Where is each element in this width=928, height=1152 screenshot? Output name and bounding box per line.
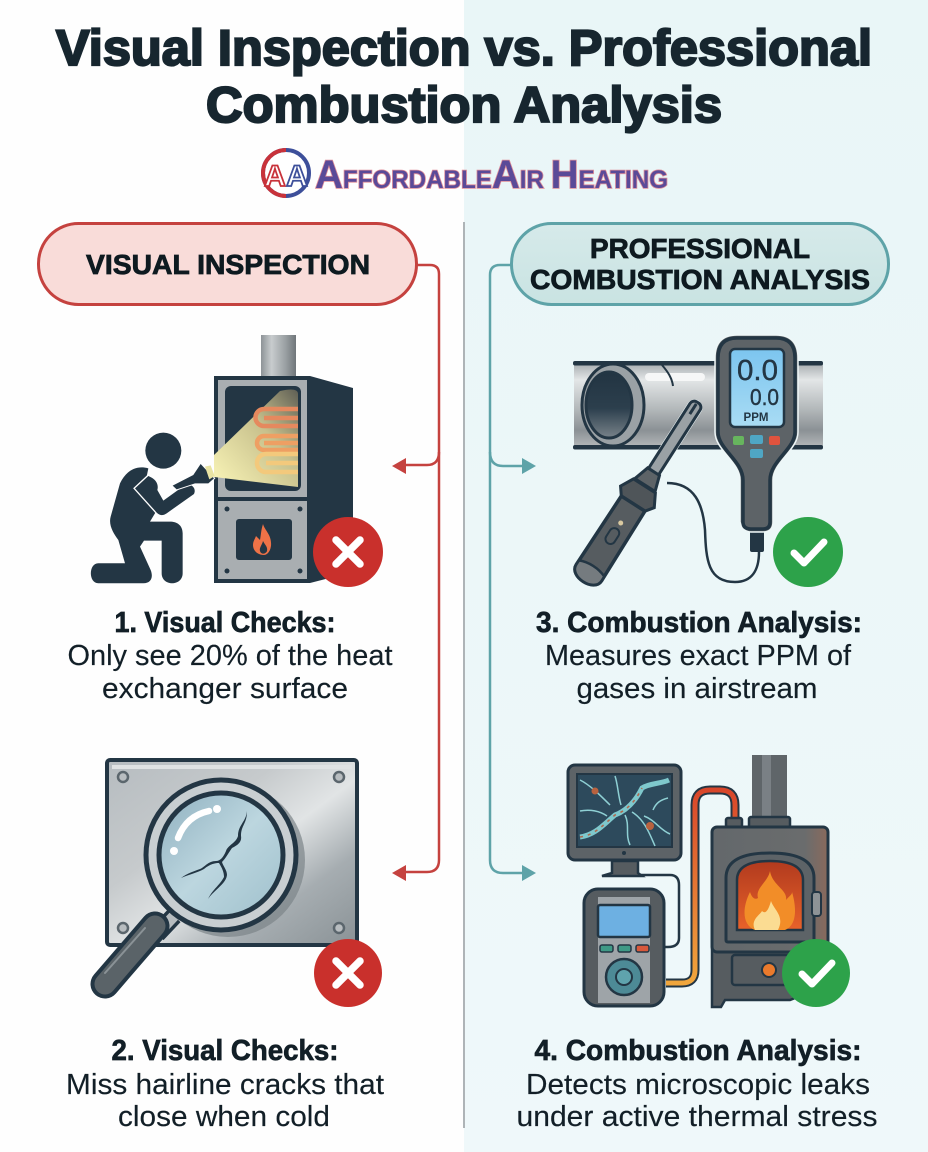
center divider (463, 222, 465, 1128)
text block: step 2: Miss hairline cracks that (66, 1069, 384, 1101)
meter body: 0.0 (737, 355, 778, 387)
magnifier shadow (151, 783, 305, 937)
text block: step 3: gases in airstream (576, 673, 818, 705)
text block: step 4: under active thermal stress (516, 1101, 878, 1133)
flashlight beam (214, 390, 298, 487)
magnifier lens (146, 780, 296, 930)
logo: Affordable Air Heating: A (286, 160, 308, 193)
exhaust pipe (573, 361, 823, 450)
arrow: combustion analysis connector (490, 265, 536, 881)
meter body: PPM (744, 412, 768, 424)
panel heading: visual inspection (38, 224, 416, 304)
furnace chimney (261, 335, 296, 376)
furnace body (214, 376, 353, 583)
arrow: visual inspection connector (392, 265, 439, 881)
text block: step 1: exchanger surface (102, 673, 348, 705)
icon: green check badge 3 (773, 517, 843, 587)
text block: step 2 (66, 1035, 384, 1133)
text block: step 2: 2. Visual Checks: (112, 1035, 338, 1067)
panel heading: professional combustion analysis (512, 224, 888, 304)
probe (566, 390, 716, 592)
text block: step 4: 4. Combustion Analysis: (534, 1035, 862, 1067)
panel: right background (464, 0, 928, 1152)
monitor with thermal crack display (568, 765, 681, 876)
icon: exhaust pipe with probe and PPM meter (566, 335, 823, 592)
icon: monitor, handheld analyzer and furnace with flame (568, 755, 828, 1007)
text block: step 4: Detects microscopic leaks (526, 1069, 870, 1101)
stove furnace (712, 755, 828, 1007)
panel heading: visual inspection: VISUAL INSPECTION (86, 249, 370, 280)
text block: step 3 (536, 607, 862, 705)
icon: person inspecting furnace with flashlight (91, 335, 353, 583)
heat exchanger coils (256, 409, 298, 472)
icon: metal plate with magnifying glass over crack (105, 760, 357, 984)
panel: left background (0, 0, 464, 1152)
panel heading: professional combustion analysis: COMBUSTION ANALYSIS (530, 264, 870, 295)
text block: step 1: Only see 20% of the heat (68, 640, 392, 672)
magnifier handle (105, 916, 174, 984)
logo: Affordable Air Heating: A (264, 160, 286, 193)
text block: step 3: Measures exact PPM of (545, 640, 852, 672)
icon: green check badge 4 (782, 939, 850, 1007)
meter body: 0.0 (750, 384, 779, 410)
icon: red X badge 1 (313, 517, 383, 587)
title: Visual Inspection vs. Professional (56, 20, 872, 76)
panel heading: professional combustion analysis: PROFESSIONAL (590, 233, 810, 264)
title: Combustion Analysis (206, 77, 722, 133)
heated hose (666, 790, 735, 983)
person silhouette (91, 433, 215, 583)
text block: step 2: close when cold (118, 1101, 330, 1133)
text block: step 1: 1. Visual Checks: (114, 607, 336, 639)
hairline crack (181, 811, 247, 899)
logo: Affordable Air Heating: AFFORDABLEAIR HEATING (315, 153, 668, 197)
meter body (715, 335, 798, 552)
text block: step 3: 3. Combustion Analysis: (536, 607, 862, 639)
text block: step 4 (516, 1035, 878, 1133)
icon: red X badge 2 (314, 939, 382, 1007)
text block: step 1 (68, 607, 392, 705)
handheld analyzer (584, 889, 664, 1006)
meter cable (667, 483, 759, 582)
title (56, 20, 872, 133)
metal plate (107, 760, 357, 945)
monitor data cable (640, 875, 679, 947)
